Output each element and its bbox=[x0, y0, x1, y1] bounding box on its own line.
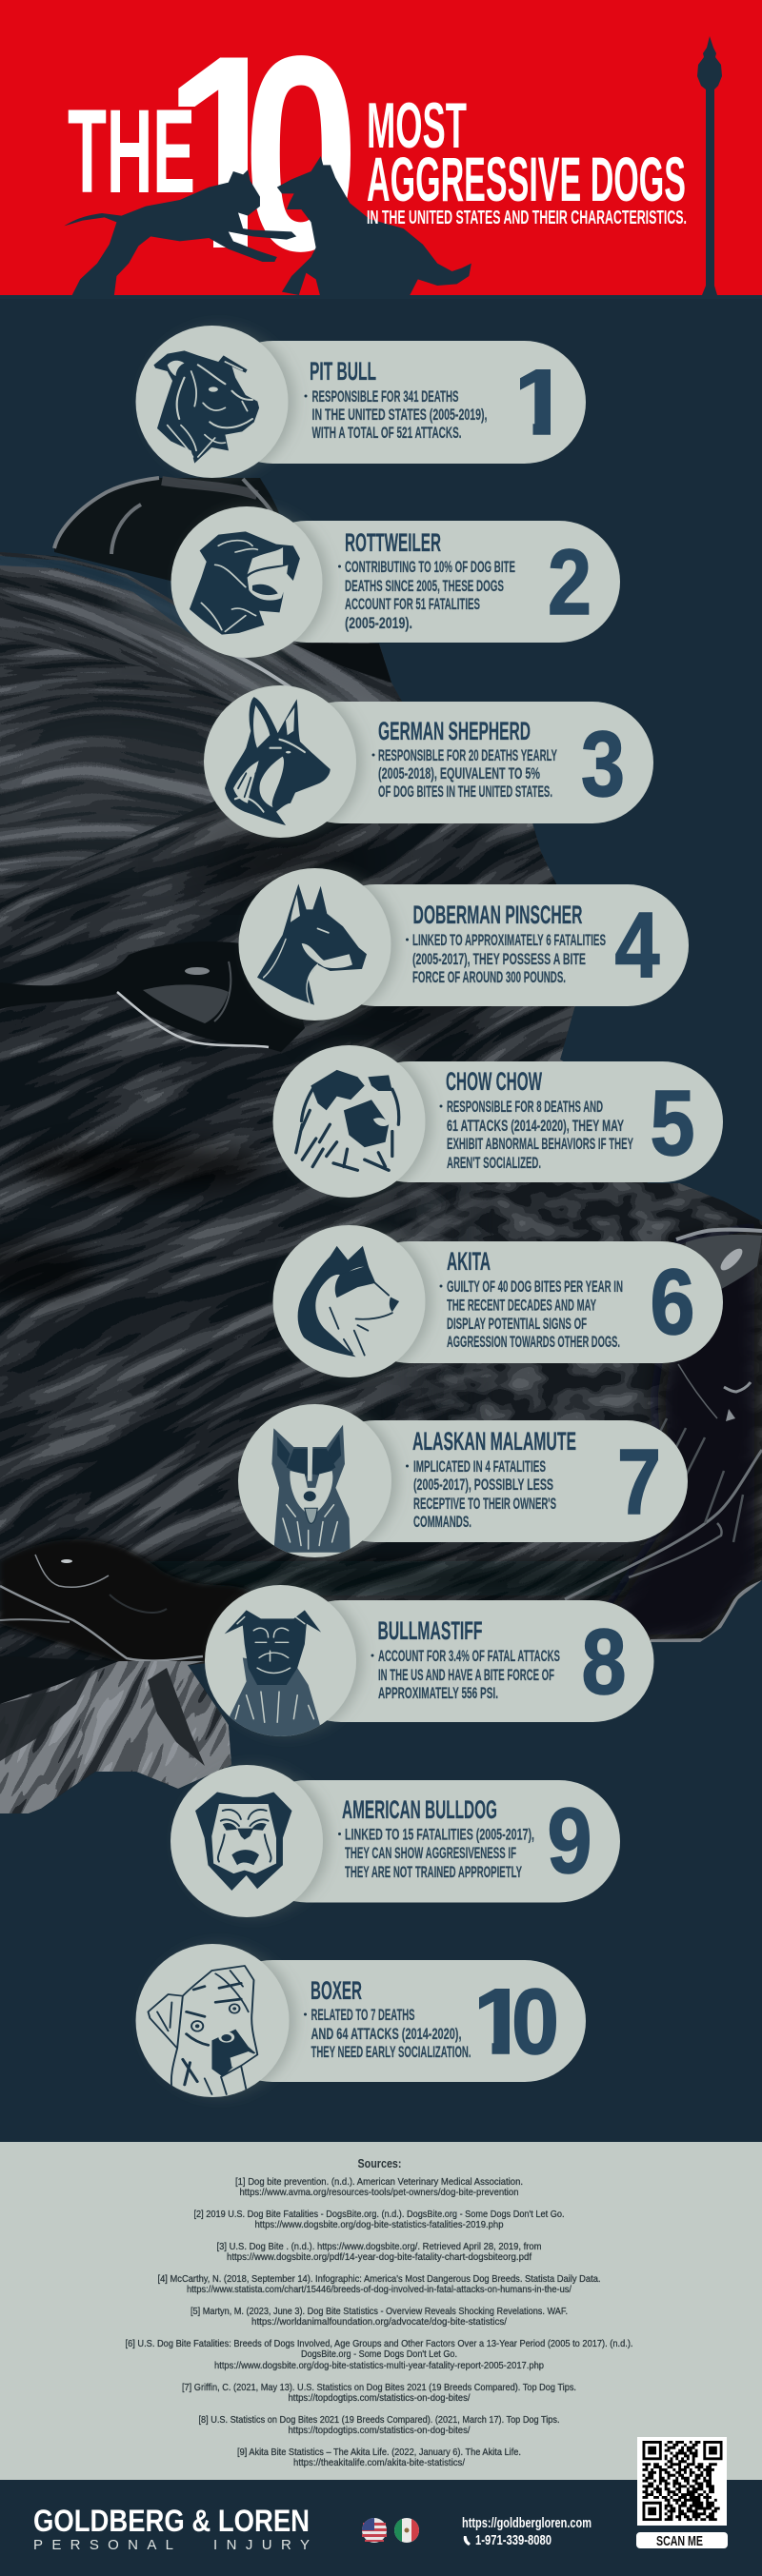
pill bbox=[280, 1600, 653, 1722]
title: CHOW CHOW bbox=[446, 1067, 542, 1096]
pill bbox=[211, 341, 586, 464]
body text: RESPONSIBLE FOR 341 DEATHS bbox=[312, 388, 459, 406]
muzzle: black lower region bbox=[0, 1539, 286, 1664]
eye: brow shadow and socket bbox=[0, 941, 305, 1052]
pill bbox=[349, 1061, 723, 1182]
icon: Mexico flag bbox=[394, 2518, 419, 2543]
tone: dark under-eye band bbox=[19, 1143, 267, 1189]
card 7: alaskan malamute bbox=[238, 1404, 688, 1557]
title: DOBERMAN PINSCHER bbox=[413, 901, 583, 929]
icon: phone bbox=[464, 2536, 471, 2546]
source list: https://theakitalife.com/akita-bite-statistics/ bbox=[293, 2457, 465, 2468]
source list: https://www.statista.com/chart/15446/breeds-of-dog-involved-in-fatal-attacks-on-humans-in-the-us/ bbox=[187, 2284, 572, 2295]
silhouette: right dog rearing bbox=[277, 156, 471, 298]
QR code bbox=[637, 2437, 727, 2526]
title number 10: 0 bbox=[243, 0, 359, 308]
panel: sources bbox=[0, 2142, 762, 2480]
card 10: boxer bbox=[135, 1944, 586, 2097]
logo: Goldberg & Loren Personal Injury: INJURY bbox=[213, 2537, 310, 2553]
portrait circle bbox=[170, 1765, 323, 1917]
body text: OF DOG BITES IN THE UNITED STATES. bbox=[378, 783, 552, 801]
body text: RESPONSIBLE FOR 20 DEATHS YEARLY bbox=[378, 747, 557, 764]
rank number: 9 bbox=[547, 1789, 592, 1892]
body text: AGGRESSION TOWARDS OTHER DOGS. bbox=[447, 1334, 620, 1351]
title word THE: THE bbox=[68, 86, 195, 218]
icon: US flag bbox=[362, 2518, 387, 2543]
pill bbox=[246, 1780, 620, 1902]
body text bbox=[440, 1099, 633, 1172]
title number 10: 1 bbox=[162, 0, 296, 307]
source list: [7] Griffin, C. (2021, May 13). U.S. Statistics on Dog Bites 2021 (19 Breeds Compared). Top Dog Tips. bbox=[182, 2382, 576, 2393]
body text bbox=[338, 1826, 534, 1881]
body text: DISPLAY POTENTIAL SIGNS OF bbox=[447, 1316, 587, 1333]
body text: ACCOUNT FOR 3.4% OF FATAL ATTACKS bbox=[378, 1648, 560, 1665]
card 5: chow chow bbox=[272, 1045, 723, 1198]
body text: RESPONSIBLE FOR 8 DEATHS AND bbox=[447, 1099, 603, 1116]
title: BULLMASTIFF bbox=[377, 1616, 482, 1645]
body text: (2005-2018), EQUIVALENT TO 5% bbox=[378, 765, 540, 783]
body text: THEY NEED EARLY SOCIALIZATION. bbox=[311, 2044, 471, 2061]
source list: [8] U.S. Statistics on Dog Bites 2021 (19 Breeds Compared). (2021, March 17). Top Dog Tips. bbox=[198, 2414, 560, 2426]
pill bbox=[246, 521, 620, 643]
icon: rottweiler head bbox=[190, 531, 300, 635]
website: https://goldbergloren.com bbox=[462, 2515, 592, 2531]
body text bbox=[440, 1278, 623, 1351]
card 3: german shepherd bbox=[204, 685, 653, 838]
portrait circle bbox=[171, 506, 322, 658]
body text: IMPLICATED IN 4 FATALITIES bbox=[413, 1458, 546, 1476]
tone: top ridge highlight bbox=[114, 581, 533, 838]
source list bbox=[126, 2176, 632, 2468]
card 6: akita bbox=[272, 1225, 723, 1377]
logo: Goldberg & Loren Personal Injury bbox=[33, 2504, 310, 2553]
source list: [5] Martyn, M. (2023, June 3). Dog Bite Statistics - Overview Reveals Shocking Revelations. WAF. bbox=[190, 2306, 568, 2317]
body text bbox=[338, 559, 515, 632]
source list: [4] McCarthy, N. (2018, September 14). Infographic: America's Most Dangerous Dog Breeds. Statista Daily Data. bbox=[158, 2273, 600, 2285]
scan me button bbox=[636, 2532, 728, 2549]
card 1: pit bull bbox=[135, 326, 586, 478]
body text: GUILTY OF 40 DOG BITES PER YEAR IN bbox=[447, 1278, 623, 1296]
icon: street lamp bbox=[697, 36, 722, 295]
body text: WITH A TOTAL OF 521 ATTACKS. bbox=[312, 425, 461, 442]
phone number: 1-971-339-8080 bbox=[475, 2532, 551, 2548]
header: red banner bbox=[0, 0, 762, 308]
body text bbox=[371, 1648, 560, 1702]
body text bbox=[305, 388, 488, 442]
rank number: 1 bbox=[510, 350, 571, 454]
logo: Goldberg & Loren Personal Injury: PERSONAL bbox=[33, 2537, 173, 2553]
footer band bbox=[34, 2437, 728, 2549]
sources heading: Sources: bbox=[358, 2157, 402, 2170]
logo: Goldberg & Loren Personal Injury: GOLDBERG & LOREN bbox=[33, 2504, 310, 2538]
body text: IN THE UNITED STATES (2005-2019), bbox=[312, 406, 488, 424]
source list: https://topdogtips.com/statistics-on-dog-bites/ bbox=[288, 2392, 471, 2404]
body text: COMMANDS. bbox=[413, 1514, 471, 1531]
source list: [1] Dog bite prevention. (n.d.). American Veterinary Medical Association. bbox=[235, 2176, 523, 2188]
card 4: doberman pinscher bbox=[238, 868, 689, 1020]
portrait circle bbox=[272, 1225, 425, 1377]
title word MOST: MOST bbox=[367, 89, 467, 162]
title: BOXER bbox=[311, 1976, 362, 2005]
portrait circle bbox=[272, 1045, 425, 1198]
body text: (2005-2017), THEY POSSESS A BITE bbox=[412, 951, 586, 968]
body text bbox=[406, 1458, 556, 1531]
ground strip under header bbox=[0, 295, 762, 299]
body text: 61 ATTACKS (2014-2020), THEY MAY bbox=[447, 1118, 624, 1135]
nose and right muzzle bbox=[565, 1228, 762, 1642]
icon: malamute head bbox=[271, 1425, 351, 1553]
source list: https://www.dogsbite.org/pdf/14-year-dog-bite-fatality-chart-dogsbiteorg.pdf bbox=[227, 2251, 531, 2263]
source list: DogsBite.org - Some Dogs Don't Let Go. bbox=[301, 2348, 457, 2360]
body text: RELATED TO 7 DEATHS bbox=[311, 2007, 415, 2024]
body text: THE RECENT DECADES AND MAY bbox=[447, 1297, 596, 1314]
body text: THEY CAN SHOW AGGRESIVENESS IF bbox=[345, 1845, 516, 1862]
rank number: 3 bbox=[581, 712, 625, 816]
title: ALASKAN MALAMUTE bbox=[412, 1427, 576, 1456]
icon: pit bull head bbox=[153, 350, 259, 464]
rank number: 0 bbox=[511, 1970, 559, 2073]
source list: https://www.dogsbite.org/dog-bite-statistics-fatalities-2019.php bbox=[255, 2219, 504, 2230]
icon: bullmastiff bbox=[225, 1610, 323, 1739]
scan me button: SCAN ME bbox=[656, 2533, 703, 2549]
portrait circle bbox=[238, 1404, 391, 1557]
pill bbox=[314, 1420, 688, 1542]
body text: IN THE US AND HAVE A BITE FORCE OF bbox=[378, 1667, 554, 1684]
rank number: 6 bbox=[650, 1250, 695, 1354]
card 2: rottweiler bbox=[171, 506, 620, 658]
portrait circle bbox=[135, 326, 288, 478]
title: AMERICAN BULLDOG bbox=[342, 1795, 497, 1824]
icon: doberman head bbox=[257, 884, 367, 1005]
pill bbox=[280, 702, 653, 823]
body text: EXHIBIT ABNORMAL BEHAVIORS IF THEY bbox=[447, 1136, 633, 1153]
title: GERMAN SHEPHERD bbox=[378, 717, 531, 745]
pill bbox=[349, 1241, 723, 1363]
rank number: 1 bbox=[469, 1970, 530, 2073]
source list: https://www.dogsbite.org/dog-bite-statistics-multi-year-fatality-report-2005-2017.php bbox=[214, 2360, 544, 2371]
rank number: 7 bbox=[617, 1430, 661, 1534]
icon: akita head bbox=[298, 1246, 399, 1357]
source list: [9] Akita Bite Statistics – The Akita Life. (2022, January 6). The Akita Life. bbox=[237, 2447, 521, 2458]
body text: CONTRIBUTING TO 10% OF DOG BITE bbox=[345, 559, 515, 576]
body text bbox=[406, 932, 606, 986]
icon: boxer head bbox=[148, 1966, 257, 2094]
source list: https://www.avma.org/resources-tools/pet-owners/dog-bite-prevention bbox=[240, 2187, 519, 2198]
icon: german shepherd head bbox=[225, 697, 331, 825]
portrait circle bbox=[238, 868, 391, 1020]
card 8: bullmastiff bbox=[205, 1585, 653, 1739]
source list: [3] U.S. Dog Bite . (n.d.). https://www.dogsbite.org/. Retrieved April 28, 2019, from bbox=[217, 2241, 542, 2252]
body text: (2005-2019). bbox=[345, 615, 412, 632]
body text: ACCOUNT FOR 51 FATALITIES bbox=[345, 596, 480, 613]
body text: FORCE OF AROUND 300 POUNDS. bbox=[412, 969, 566, 986]
body text: (2005-2017), POSSIBLY LESS bbox=[413, 1476, 553, 1494]
head fur mass bbox=[0, 552, 762, 1813]
body text bbox=[371, 747, 557, 801]
body text: APPROXIMATELY 556 PSI. bbox=[378, 1685, 498, 1702]
title: AKITA bbox=[447, 1247, 491, 1276]
portrait circle bbox=[205, 1585, 356, 1736]
chin fur bbox=[0, 1656, 231, 1813]
card 9: american bulldog bbox=[170, 1765, 620, 1917]
title number 10 bbox=[178, 55, 351, 252]
source list: https://topdogtips.com/statistics-on-dog-bites/ bbox=[288, 2425, 471, 2436]
body text: AREN'T SOCIALIZED. bbox=[447, 1155, 541, 1172]
icon: bulldog face bbox=[195, 1792, 291, 1891]
body text: RECEPTIVE TO THEIR OWNER'S bbox=[413, 1496, 556, 1513]
rank number: 8 bbox=[581, 1610, 627, 1714]
back ear bbox=[54, 478, 286, 609]
title: PIT BULL bbox=[310, 357, 376, 386]
background illustration: giant dog face bbox=[0, 476, 762, 1813]
source list: [2] 2019 U.S. Dog Bite Fatalities - DogsBite.org. (n.d.). DogsBite.org - Some Dogs Don't Let Go. bbox=[194, 2209, 564, 2220]
rank number: 4 bbox=[615, 893, 660, 997]
body text: DEATHS SINCE 2005, THESE DOGS bbox=[345, 578, 504, 595]
body text bbox=[304, 2007, 471, 2061]
body text: THEY ARE NOT TRAINED APPROPIETLY bbox=[345, 1864, 522, 1881]
tone: soft lights and shadows bbox=[0, 721, 226, 862]
portrait circle bbox=[135, 1944, 290, 2097]
rank number: 5 bbox=[650, 1071, 695, 1175]
silhouette: left dog leaping bbox=[64, 169, 296, 298]
source list: [6] U.S. Dog Bite Fatalities: Breeds of Dogs Involved, Age Groups and Other Factors Over a 13-Year Period (2005 to 2017). (n.d.). bbox=[126, 2338, 632, 2349]
body text: AND 64 ATTACKS (2014-2020), bbox=[311, 2026, 461, 2043]
source list: https://worldanimalfoundation.org/advocate/dog-bite-statistics/ bbox=[251, 2316, 507, 2328]
rank number bbox=[479, 1988, 556, 2055]
icon: chow chow head bbox=[296, 1070, 399, 1170]
pill bbox=[211, 1960, 586, 2082]
title: ROTTWEILER bbox=[345, 528, 441, 557]
body text: LINKED TO APPROXIMATELY 6 FATALITIES bbox=[412, 932, 606, 949]
body text: LINKED TO 15 FATALITIES (2005-2017), bbox=[345, 1826, 534, 1843]
portrait circle bbox=[204, 685, 356, 838]
rank number: 2 bbox=[548, 530, 592, 634]
pill bbox=[314, 884, 689, 1006]
